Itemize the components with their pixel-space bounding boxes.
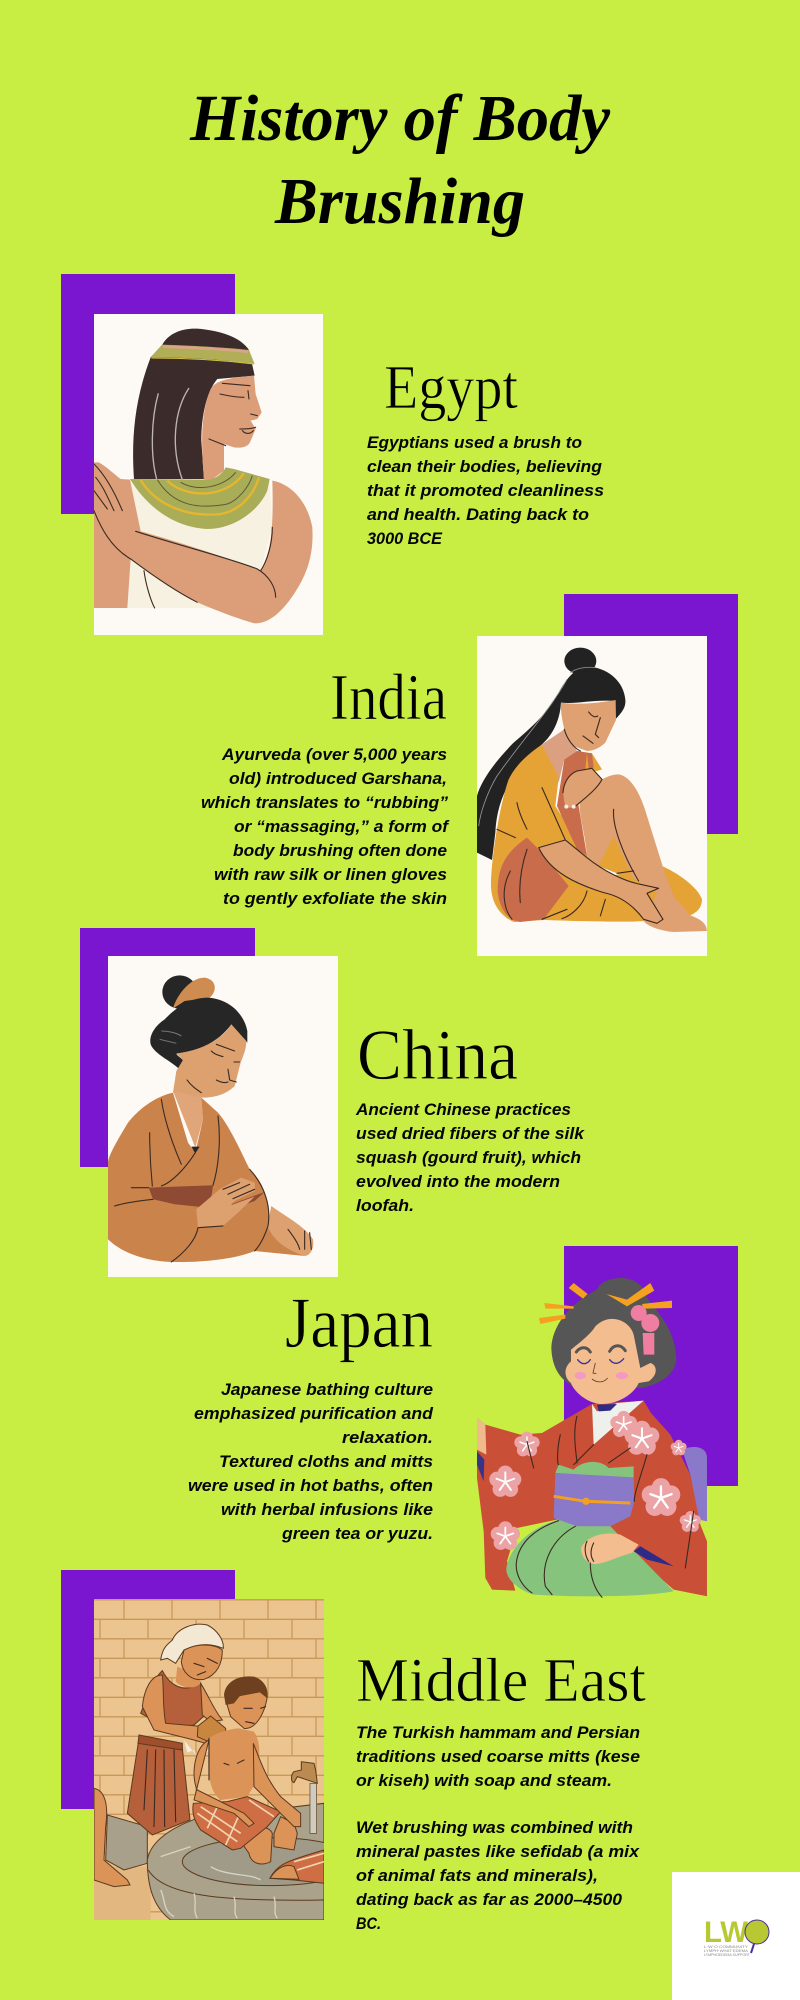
text: Egypt description bbox=[367, 433, 604, 548]
title: Brushing bbox=[274, 165, 525, 238]
text: India description: with raw silk or linen gloves bbox=[214, 865, 447, 884]
text: Japan description: emphasized purification and bbox=[194, 1404, 434, 1423]
illustration: Indian woman bbox=[477, 648, 707, 932]
heading: India: India bbox=[330, 661, 447, 734]
text: Japan description bbox=[188, 1380, 434, 1543]
text: India description: old) introduced Garshana, bbox=[229, 769, 447, 788]
text: China description: evolved into the modern bbox=[356, 1172, 560, 1191]
purple backing block: Middle East bbox=[61, 1570, 235, 1809]
purple backing block: China bbox=[80, 928, 255, 1167]
text: India description: or “massaging,” a form of bbox=[234, 817, 450, 836]
panel: India bbox=[201, 594, 738, 956]
text: China description: loofah. bbox=[356, 1196, 414, 1215]
text: Middle East description: of animal fats and minerals), bbox=[356, 1866, 598, 1885]
text: Japan description: Textured cloths and mitts bbox=[219, 1452, 433, 1471]
kimono flowers bbox=[489, 1411, 701, 1550]
panel: Middle East bbox=[61, 1570, 646, 1933]
title bbox=[189, 82, 611, 238]
image card: India bbox=[477, 636, 707, 956]
purple backing block: India bbox=[564, 594, 738, 834]
image card: Egypt bbox=[94, 314, 323, 635]
logo: LWO bbox=[704, 1916, 769, 1957]
text: Egypt description: 3000 BCE bbox=[367, 529, 443, 548]
text: Egypt description: Egyptians used a brush to bbox=[367, 433, 582, 452]
text: Japan description: with herbal infusions like bbox=[221, 1500, 433, 1519]
logo: LWO: LW bbox=[704, 1916, 749, 1949]
text: Middle East description: dating back as far as 2000–4500 bbox=[356, 1890, 623, 1909]
logo: LWO: LYMPHOEDEMA SUPPORT bbox=[704, 1953, 751, 1957]
text: Egypt description: and health. Dating back to bbox=[367, 505, 589, 524]
text: Middle East description: The Turkish hammam and Persian bbox=[356, 1723, 640, 1742]
text: Egypt description: that it promoted cleanliness bbox=[367, 481, 604, 500]
text: Japan description: were used in hot baths, often bbox=[188, 1476, 433, 1495]
text: Middle East description: BC. bbox=[356, 1914, 381, 1933]
heading: China: China bbox=[357, 1015, 518, 1095]
text: Middle East description: Wet brushing was combined with bbox=[356, 1818, 633, 1837]
heading: Japan: Japan bbox=[285, 1283, 433, 1363]
brick wall background bbox=[94, 1599, 324, 1920]
text: Japan description: Japanese bathing culture bbox=[221, 1380, 433, 1399]
panel: Egypt bbox=[61, 274, 604, 635]
panel: China bbox=[80, 928, 586, 1277]
image card: China bbox=[108, 956, 338, 1277]
text: India description: Ayurveda (over 5,000 years bbox=[221, 745, 447, 764]
illustration: hammam scene bbox=[94, 1624, 324, 1920]
text: China description bbox=[355, 1100, 586, 1215]
text: China description: Ancient Chinese practices bbox=[355, 1100, 571, 1119]
illustration: Egyptian woman bbox=[94, 329, 313, 623]
logo panel bbox=[672, 1872, 800, 2000]
logo: LWO: LYMPH·WHAT·EDEMA bbox=[704, 1948, 748, 1953]
panel: Japan bbox=[188, 1246, 738, 1597]
text: China description: squash (gourd fruit), which bbox=[356, 1148, 581, 1167]
text: Egypt description: clean their bodies, believing bbox=[367, 457, 603, 476]
text: China description: used dried fibers of the silk bbox=[356, 1124, 586, 1143]
text: Japan description: relaxation. bbox=[342, 1428, 433, 1447]
text: Middle East description: traditions used coarse mitts (kese bbox=[356, 1747, 640, 1766]
logo: LWO: L·W·O COMMUNITY bbox=[704, 1944, 748, 1949]
text: India description: to gently exfoliate the skin bbox=[223, 889, 447, 908]
purple backing block: Japan bbox=[564, 1246, 738, 1486]
text: Middle East description bbox=[356, 1723, 641, 1933]
illustration: Japanese woman in kimono bbox=[477, 1278, 707, 1597]
text: India description: which translates to “rubbing” bbox=[201, 793, 449, 812]
illustration: Chinese woman bbox=[108, 975, 313, 1262]
text: Middle East description: mineral pastes like sefidab (a mix bbox=[356, 1842, 641, 1861]
title: History of Body bbox=[189, 82, 611, 155]
text: Middle East description: or kiseh) with soap and steam. bbox=[356, 1771, 612, 1790]
text: India description bbox=[201, 745, 450, 908]
heading: Egypt: Egypt bbox=[384, 354, 518, 422]
text: Japan description: green tea or yuzu. bbox=[281, 1524, 433, 1543]
text: India description: body brushing often done bbox=[233, 841, 447, 860]
heading: Middle East: Middle East bbox=[356, 1647, 646, 1715]
purple backing block: Egypt bbox=[61, 274, 235, 514]
